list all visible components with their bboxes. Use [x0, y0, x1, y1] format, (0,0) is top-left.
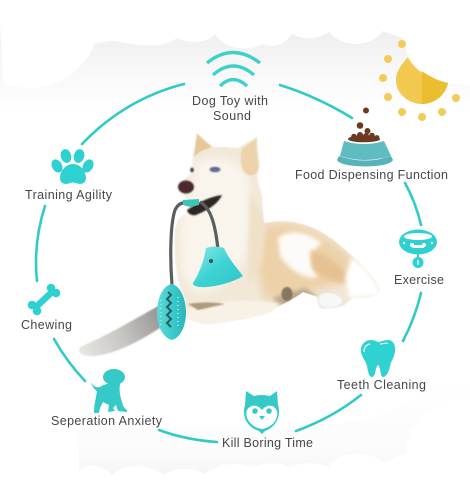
label: Training Agility: Training Agility: [25, 188, 113, 202]
label: Chewing: Chewing: [21, 318, 72, 332]
chest white: [180, 158, 251, 292]
icon: tooth: [361, 340, 395, 377]
dog elbow mark: [282, 287, 292, 301]
label: Exercise: Exercise: [394, 273, 444, 287]
suction cup: [193, 246, 243, 287]
thigh white: [278, 232, 322, 277]
thigh tan patch: [310, 250, 350, 282]
rope right: [200, 202, 218, 250]
mouth grip: [183, 199, 199, 207]
dog nose: [178, 180, 194, 194]
icon: bone: [28, 284, 60, 315]
sun icon: [379, 40, 460, 121]
label: Dog Toy with Sound: Dog Toy with: [192, 94, 268, 108]
dog right ear: [241, 138, 259, 175]
icon: food bowl: [337, 108, 393, 166]
dog left ear: [194, 134, 212, 157]
suction toy: [157, 199, 243, 340]
textured ball: [157, 284, 186, 340]
dog eyes: [190, 167, 220, 172]
icon: paw: [49, 148, 96, 184]
label: Teeth Cleaning: Teeth Cleaning: [337, 378, 426, 392]
label: Seperation Anxiety: Seperation Anxiety: [51, 414, 163, 428]
label: Dog Toy with Sound: Sound: [213, 109, 251, 123]
dog photo illustration: [79, 133, 380, 356]
back tan: [256, 223, 352, 300]
dog foreleg stretched: [79, 305, 160, 356]
neck cream side: [248, 190, 266, 285]
dog mouth: [187, 195, 222, 215]
label: Kill Boring Time: Kill Boring Time: [222, 436, 313, 450]
background: bottom cloud band: [79, 378, 470, 500]
background: top cloud band: [0, 0, 470, 113]
ring of teal arcs: [36, 84, 421, 442]
forearm crease: [188, 302, 225, 310]
dog rear paw: [318, 292, 343, 308]
forearm: [188, 300, 278, 323]
icon: shiba face: [244, 391, 279, 434]
icon: puppy silhouette: [91, 369, 127, 413]
dog coat shading: [180, 158, 380, 326]
belly shadow: [272, 286, 318, 306]
icon: sound waves: [207, 52, 260, 86]
icon: collar: [399, 230, 437, 268]
label: Food Dispensing Function: Food Dispensing Function: [295, 168, 448, 182]
rump white fur: [345, 258, 380, 298]
rope left: [171, 203, 187, 285]
label: Dog Toy with Sound: [192, 94, 268, 123]
dog body: [175, 133, 380, 324]
